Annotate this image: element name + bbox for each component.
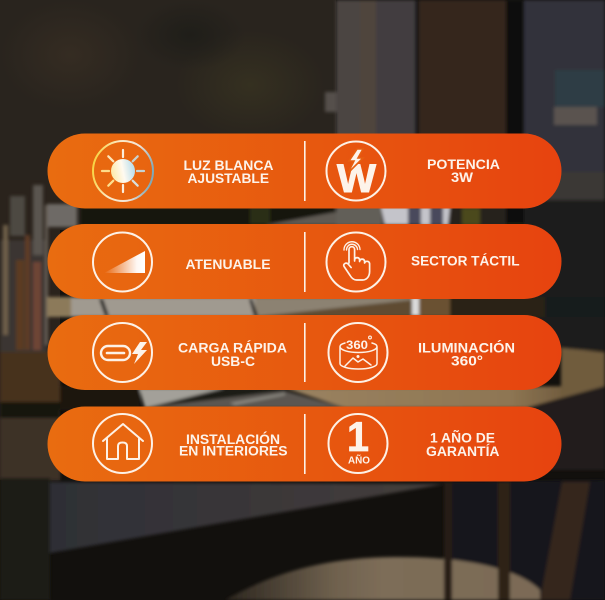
divider <box>304 232 306 292</box>
icon: 3W power: W <box>337 157 376 201</box>
panel: row 1 <box>48 134 562 208</box>
icon: 360 illumination: 360 <box>346 340 368 352</box>
icon: one year warranty: AÑO <box>348 454 370 466</box>
table surfaces <box>0 348 605 600</box>
label: 1 ano de garantia <box>426 431 500 459</box>
label: 1 ano de garantia: GARANTÍA <box>426 444 500 459</box>
icon: adjustable white light sun <box>93 141 153 201</box>
label: iluminacion 360: 360° <box>451 354 483 368</box>
window frame and shelves <box>325 0 605 350</box>
lamp head and stem <box>381 207 450 316</box>
icon: usb-c fast charge <box>93 323 152 382</box>
pill background <box>48 134 562 208</box>
icon: house <box>93 414 152 473</box>
label: sector tactil: SECTOR TÁCTIL <box>411 254 520 269</box>
label: carga rapida usb-c: CARGA RÁPIDA <box>178 341 287 356</box>
gap strip: upper row <box>80 207 506 226</box>
label: luz blanca ajustable <box>184 158 274 186</box>
label: iluminacion 360: ILUMINACIÓN <box>418 340 515 356</box>
pill background <box>48 315 562 390</box>
label: luz blanca ajustable: AJUSTABLE <box>188 171 269 186</box>
icon: 360 illumination <box>328 323 388 382</box>
label: instalacion en interiores <box>179 432 288 459</box>
label: potencia 3w <box>427 157 500 185</box>
pill background <box>48 224 562 299</box>
label: instalacion en interiores: EN INTERIORES <box>179 444 288 459</box>
label: potencia 3w: 3W <box>451 170 473 185</box>
icon: 3W power <box>326 142 386 201</box>
chair <box>225 482 590 600</box>
label: carga rapida usb-c: USB-C <box>211 354 255 369</box>
icon: dimmable wedge <box>93 232 152 292</box>
label: atenuable: ATENUABLE <box>186 257 270 272</box>
panel: row 4 <box>48 406 562 482</box>
pill background <box>48 406 562 482</box>
brushes jar <box>0 185 77 352</box>
label: potencia 3w: POTENCIA <box>427 157 500 172</box>
label: 1 ano de garantia: 1 AÑO DE <box>430 431 495 446</box>
divider <box>304 414 306 474</box>
icon: one year warranty <box>328 413 388 473</box>
divider <box>304 323 306 382</box>
label: luz blanca ajustable: LUZ BLANCA <box>184 158 274 173</box>
label: instalacion en interiores: INSTALACIÓN <box>186 432 280 447</box>
laptop lid strip <box>60 297 605 317</box>
label: carga rapida usb-c <box>178 341 287 369</box>
dark wall <box>0 0 325 140</box>
panel: row 3 <box>48 315 562 390</box>
icon: touch hand <box>326 232 386 292</box>
panel: row 2 <box>48 224 562 299</box>
icon: one year warranty: 1 <box>347 413 369 460</box>
divider <box>304 141 306 201</box>
label: iluminacion 360 <box>418 340 515 368</box>
